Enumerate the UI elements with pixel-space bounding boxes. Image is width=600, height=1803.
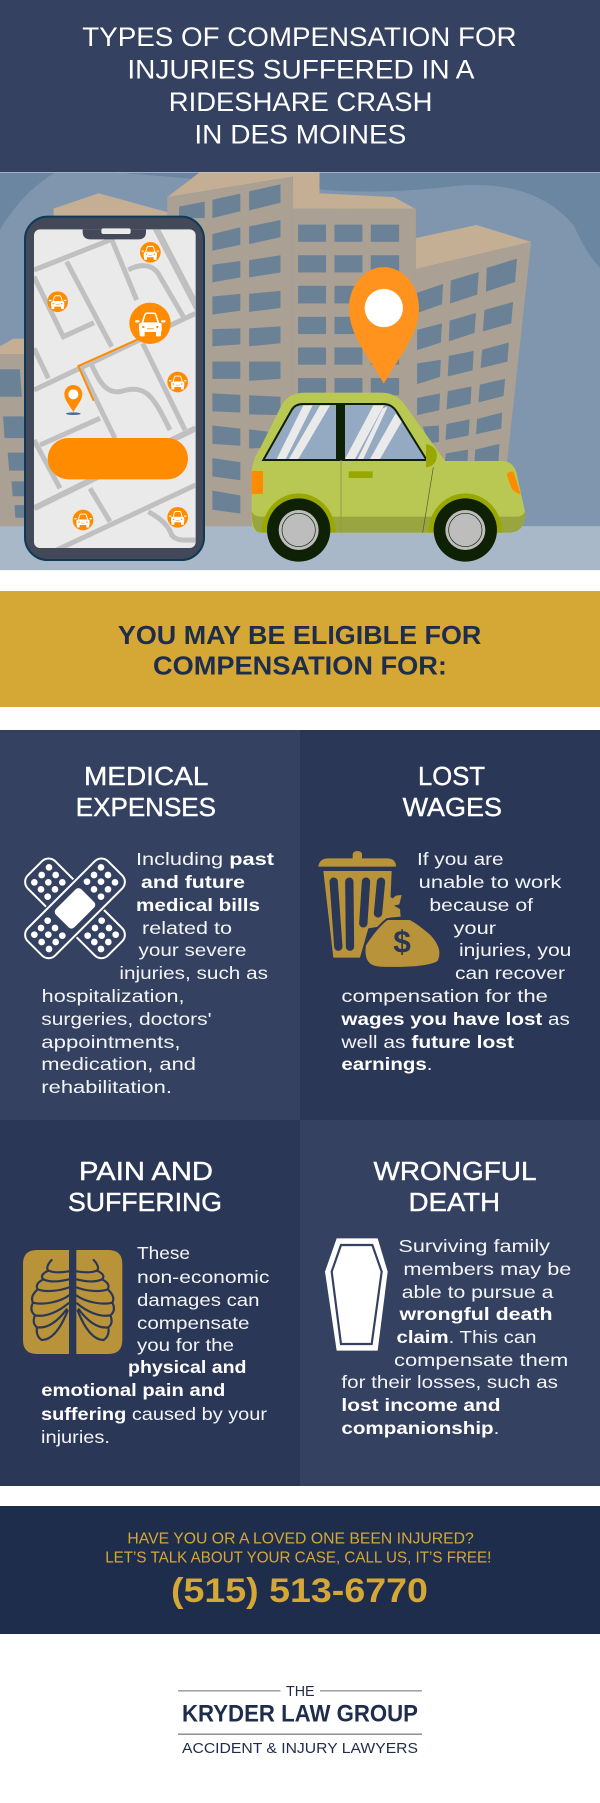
body text: medical: and future (141, 872, 245, 892)
gold heading banner: YOU MAY BE ELIGIBLE FOR (118, 620, 482, 650)
panel: lost wages (300, 730, 600, 1120)
body text: medical: appointments, (41, 1032, 181, 1052)
gold heading banner: COMPENSATION FOR: (153, 650, 447, 680)
body text: lost wages: because of (429, 895, 533, 915)
body text: medical: your severe (138, 940, 246, 960)
body text: wrongful death: companionship . (341, 1418, 499, 1438)
title banner: IN DES MOINES (194, 120, 406, 150)
title banner: RIDESHARE CRASH (169, 87, 432, 117)
body text: wrongful death: able to pursue a (402, 1282, 554, 1302)
call to action band: LET’S TALK ABOUT YOUR CASE, CALL US, IT’S FREE! (105, 1550, 491, 1566)
phone with map (25, 217, 204, 560)
body text: lost wages: compensation for the (341, 986, 548, 1006)
body text: pain: suffering caused by your (41, 1404, 267, 1424)
body text: lost wages: can recover (455, 963, 565, 983)
panel: medical expenses: MEDICAL (84, 761, 208, 791)
icon: trash can and money bag: $ (393, 923, 411, 959)
green car (252, 393, 525, 562)
title banner (0, 0, 600, 172)
body text: wrongful death: members may be (403, 1259, 571, 1279)
body text: lost wages (340, 849, 571, 1074)
body text: wrongful death: compensate them (394, 1350, 568, 1370)
body text: medical: hospitalization, (42, 986, 185, 1006)
body text: lost wages: well as future lost (340, 1032, 514, 1052)
body text: medical (41, 849, 274, 1097)
body text: medical: Including past (136, 849, 274, 869)
body text: wrongful death: lost income and (341, 1395, 501, 1415)
body text: wrongful death: wrongful death (398, 1304, 553, 1324)
body text: pain: compensate (137, 1313, 250, 1333)
logo: KRYDER LAW GROUP (182, 1700, 418, 1728)
body text: wrongful death: claim . This can (396, 1327, 536, 1347)
logo (178, 1684, 422, 1757)
body text: lost wages: If you are (417, 849, 504, 869)
body text: pain: physical and (128, 1357, 246, 1377)
call to action band: (515) 513-6770 (171, 1572, 428, 1610)
gold heading banner (0, 591, 600, 707)
body text: lost wages: wages you have lost as (340, 1009, 570, 1029)
panel: medical expenses: EXPENSES (76, 792, 216, 822)
panel: pain and suffering: SUFFERING (68, 1187, 222, 1217)
body text: pain: you for the (137, 1335, 234, 1355)
body text: lost wages: unable to work (419, 872, 562, 892)
body text: wrongful death: for their losses, such as (341, 1372, 558, 1392)
icon: bandages (20, 853, 130, 964)
panel: medical expenses (0, 730, 300, 1120)
call to action band (0, 1506, 600, 1634)
logo: ACCIDENT & INJURY LAWYERS (182, 1741, 418, 1757)
panel: pain and suffering (0, 1120, 300, 1486)
panel: lost wages: WAGES (403, 792, 502, 822)
body text: medical: related to (142, 918, 232, 938)
body text: medical: surgeries, doctors' (41, 1009, 212, 1029)
car markers (47, 242, 188, 530)
body text: medical: medical bills (136, 895, 260, 915)
route line (78, 340, 137, 400)
body text: lost wages: injuries, you (459, 940, 571, 960)
body text: wrongful death (341, 1236, 571, 1438)
panel: wrongful death (300, 1120, 600, 1486)
body text: wrongful death: Surviving family (398, 1236, 550, 1256)
panel: pain and suffering: PAIN AND (79, 1156, 213, 1186)
title banner: TYPES OF COMPENSATION FOR (82, 22, 517, 52)
panel: wrongful death: DEATH (409, 1187, 500, 1217)
small pin (64, 385, 82, 415)
body text: medical: rehabilitation. (41, 1077, 172, 1097)
icon: rib cage (23, 1250, 122, 1354)
body text: pain (41, 1243, 270, 1447)
icon: trash can and money bag (318, 851, 440, 968)
body text: pain: These (137, 1243, 190, 1263)
title banner: INJURIES SUFFERED IN A (127, 54, 475, 84)
panel: lost wages: LOST (418, 761, 485, 791)
body text: lost wages: your (454, 918, 496, 938)
body text: pain: emotional pain and (41, 1380, 225, 1400)
body text: lost wages: earnings . (341, 1054, 432, 1074)
logo: THE (286, 1684, 315, 1700)
icon: coffin (325, 1238, 388, 1351)
body text: pain: damages can (137, 1290, 260, 1310)
call to action band: HAVE YOU OR A LOVED ONE BEEN INJURED? (127, 1530, 474, 1548)
body text: pain: non-economic (137, 1267, 270, 1287)
body text: pain: injuries. (41, 1427, 110, 1447)
icon: location pin (349, 267, 419, 384)
panel: wrongful death: WRONGFUL (374, 1156, 536, 1186)
city background illustration (0, 172, 600, 570)
body text: medical: injuries, such as (119, 963, 268, 983)
orange button (48, 438, 188, 479)
body text: medical: medication, and (41, 1054, 196, 1074)
